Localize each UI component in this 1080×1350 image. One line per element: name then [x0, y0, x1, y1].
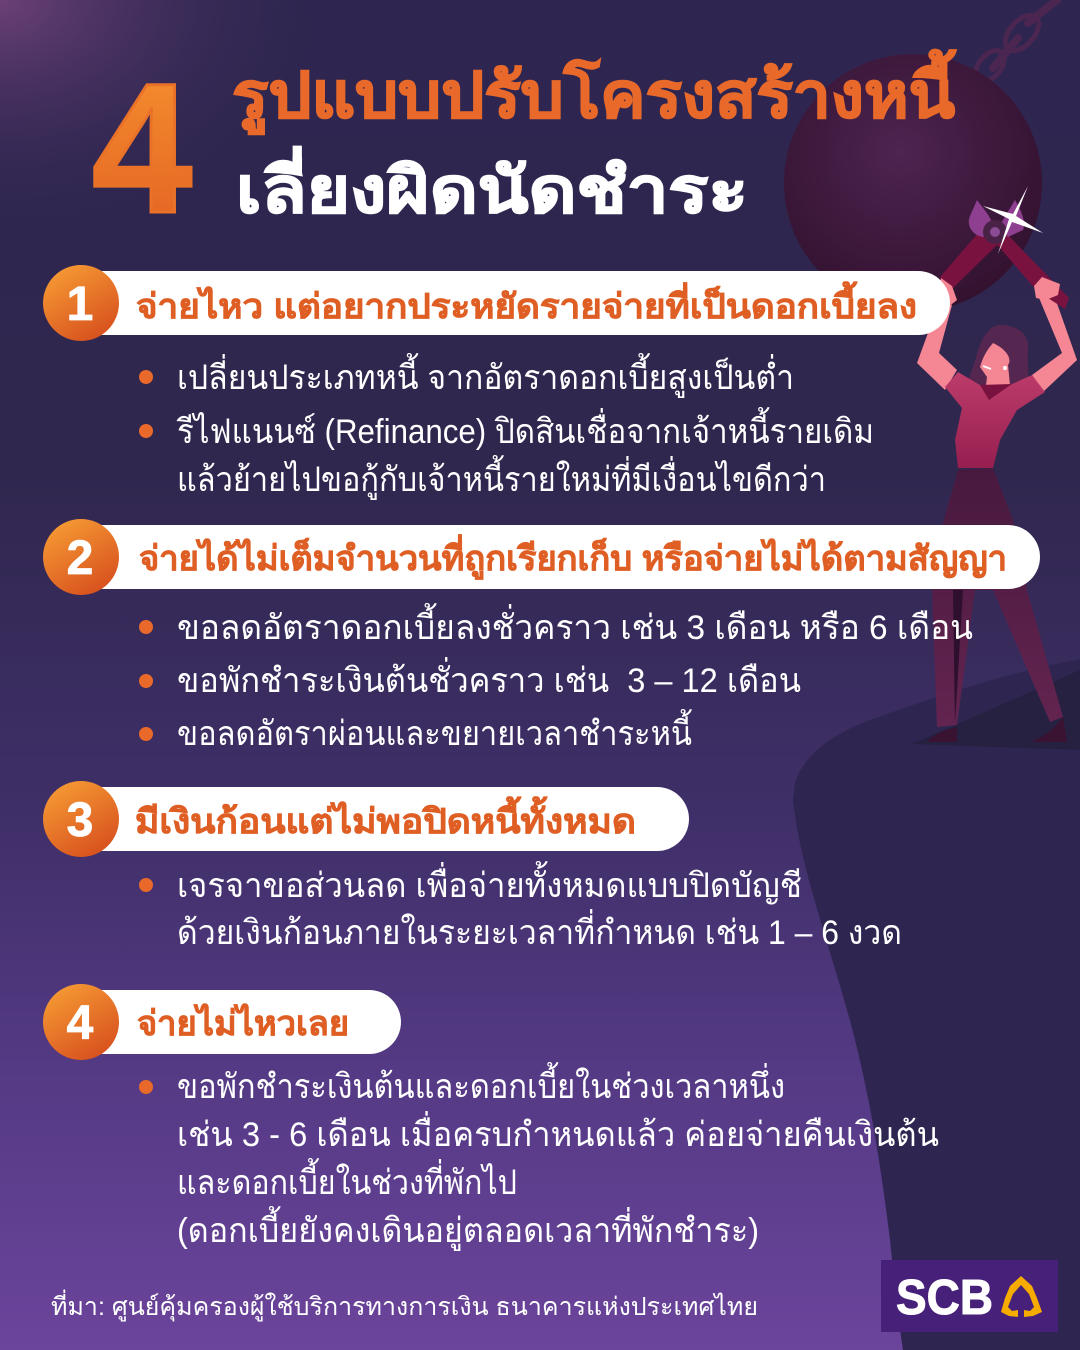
- section 4 bullets: [139, 1062, 939, 1251]
- section 2 heading: 2: [67, 532, 93, 585]
- cliff hill: [793, 659, 1080, 1350]
- hands: [937, 277, 1060, 308]
- section 3 heading: 3: [67, 794, 93, 847]
- SCB logo: SCB: [896, 1271, 993, 1325]
- sparkle: [983, 186, 1043, 254]
- woman's hair: [968, 325, 1028, 392]
- title number: 4: [92, 46, 192, 252]
- section 2 bullets: [139, 603, 973, 753]
- title line 2: เลี่ยงผิดนัดชำระ: [236, 146, 748, 226]
- section 4 bullets: ขอพักชำระเงินต้นและดอกเบี้ยในช่วงเวลาหนึ่ง: [177, 1062, 785, 1106]
- woman's arms: [917, 292, 1077, 392]
- cliff shadow: [912, 670, 1080, 750]
- title line 1: รูปแบบปรับโครงสร้างหนี้: [232, 49, 957, 135]
- section 2 bullets: ขอพักชำระเงินต้นชั่วคราว เช่น 3 – 12 เดือน: [177, 657, 801, 700]
- section 1 bullets: แล้วย้ายไปขอกู้กับเจ้าหนี้รายใหม่ที่มีเงื่อนไขดีกว่า: [177, 455, 826, 500]
- cutter jaws: [969, 200, 1024, 237]
- section 3 heading: มีเงินก้อนแต่ไม่พอปิดหนี้ทั้งหมด: [135, 796, 636, 841]
- woman's pants: [932, 468, 1063, 727]
- woman's shoes: [927, 717, 1067, 742]
- SCB logo: [881, 1260, 1058, 1332]
- section 4 bullets: เช่น 3 - 6 เดือน เมื่อครบกำหนดแล้ว ค่อยจ่ายคืนเงินต้น: [177, 1111, 939, 1154]
- section 2 bullets: ขอลดอัตราดอกเบี้ยลงชั่วคราว เช่น 3 เดือน หรือ 6 เดือน: [177, 603, 973, 647]
- section 3 bullets: [139, 861, 902, 952]
- section 1 bullets: [139, 353, 874, 500]
- section 2 bullets: ขอลดอัตราผ่อนและขยายเวลาชำระหนี้: [177, 709, 693, 753]
- section 4 heading: จ่ายไม่ไหวเลย: [137, 1003, 349, 1043]
- source note: ที่มา: ศูนย์คุ้มครองผู้ใช้บริการทางการเงิน ธนาคารแห่งประเทศไทย: [51, 1289, 758, 1322]
- woman's face: [980, 343, 1010, 393]
- section 1 heading: 1: [67, 278, 93, 331]
- section 1 heading: [43, 265, 950, 341]
- section 1 bullets: เปลี่ยนประเภทหนี้ จากอัตราดอกเบี้ยสูงเป็นต่ำ: [177, 353, 794, 398]
- woman's shirt: [945, 372, 1045, 468]
- section 2 heading: [43, 519, 1040, 595]
- section 1 bullets: รีไฟแนนซ์ (Refinance) ปิดสินเชื่อจากเจ้าหนี้รายเดิม: [176, 407, 874, 451]
- illustration: woman with cutters: [917, 186, 1077, 742]
- icon: wrecking ball: [784, 54, 1042, 312]
- section 4 heading: [43, 984, 401, 1060]
- cutter handles: [940, 224, 1069, 309]
- section 4 bullets: และดอกเบี้ยในช่วงที่พักไป: [177, 1158, 517, 1202]
- section 4 heading: 4: [67, 997, 94, 1050]
- section 3 bullets: เจรจาขอส่วนลด เพื่อจ่ายทั้งหมดแบบปิดบัญชี: [177, 861, 802, 905]
- section 2 heading: จ่ายได้ไม่เต็มจำนวนที่ถูกเรียกเก็บ หรือจ่ายไม่ได้ตามสัญญา: [139, 534, 1007, 580]
- icon: chain: [970, 0, 1057, 87]
- section 4 bullets: (ดอกเบี้ยยังคงเดินอยู่ตลอดเวลาที่พักชำระ): [177, 1206, 759, 1251]
- section 3 heading: [43, 781, 689, 857]
- section 3 bullets: ด้วยเงินก้อนภายในระยะเวลาที่กำหนด เช่น 1 – 6 งวด: [177, 909, 902, 952]
- section 1 heading: จ่ายไหว แต่อยากประหยัดรายจ่ายที่เป็นดอกเบี้ยลง: [136, 281, 917, 326]
